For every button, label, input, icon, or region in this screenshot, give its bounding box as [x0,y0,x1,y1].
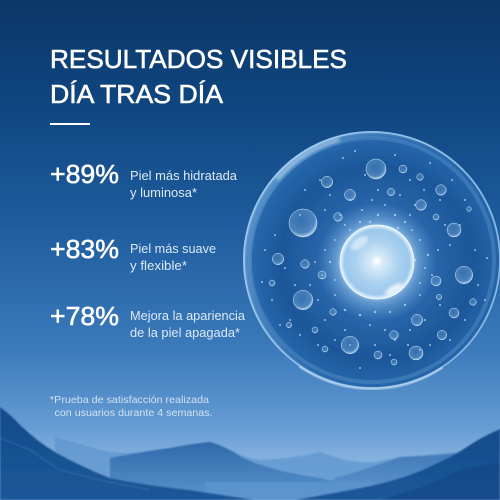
stat: 78%: de la piel apagada* [130,325,240,340]
stat: 83%: y flexible* [130,258,187,273]
stat: 89%: Piel más hidratada [130,168,238,183]
bubbles [269,159,476,365]
title [50,46,347,109]
stat: 89%: y luminosa* [130,185,197,200]
title: RESULTADOS VISIBLES [50,46,347,74]
water sphere illustration [243,131,500,389]
footnote: con usuarios durante 4 semanas. [54,407,212,419]
stat: 89% [50,159,238,200]
mountain landscape [0,407,500,500]
footnote: *Prueba de satisfacción realizada [50,394,209,406]
stat: 78%: Mejora la apariencia [130,308,246,323]
small droplets [261,150,488,369]
stat: 83%: Piel más suave [130,241,216,256]
stat: 89%: +89% [50,159,119,189]
stat: 83% [50,234,216,273]
title underline [50,123,90,125]
footnote [50,394,212,419]
stat: 78%: +78% [50,301,119,331]
central glowing sphere [317,202,437,322]
title: DÍA TRAS DÍA [50,80,223,109]
stat: 78% [50,301,246,340]
stat: 83%: +83% [50,234,119,264]
